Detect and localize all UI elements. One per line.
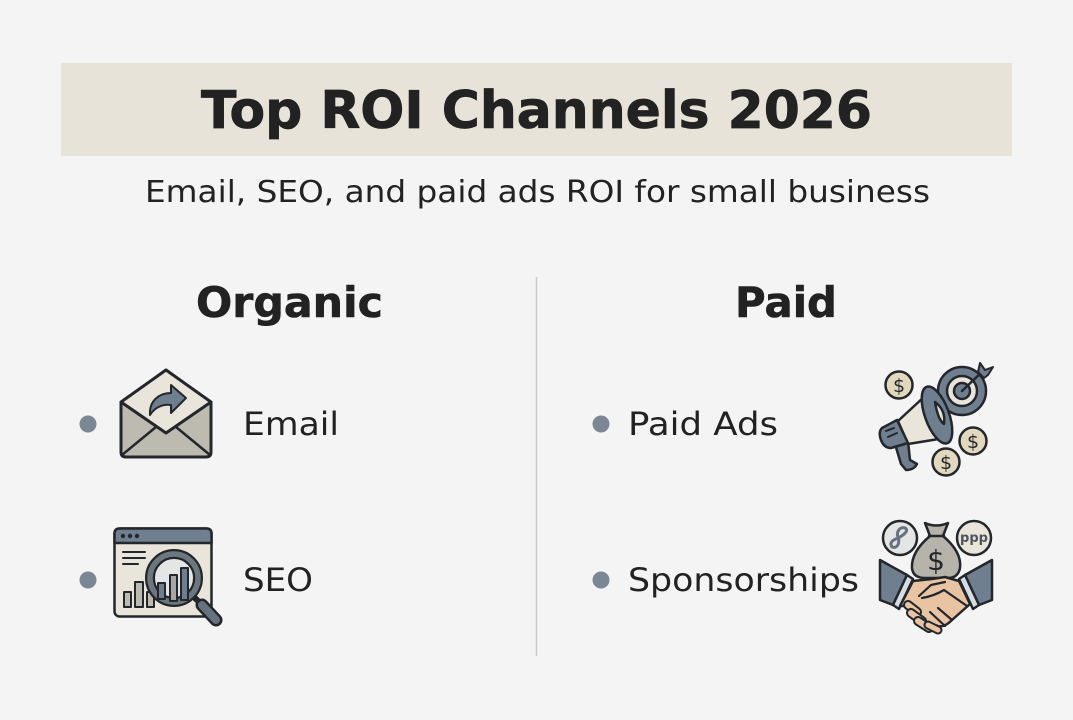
label: email: Email xyxy=(243,405,339,443)
label: sponsorships: Sponsorships xyxy=(628,561,859,599)
icon: handshake with money bag xyxy=(880,521,992,630)
icon: megaphone with target and coins: $ xyxy=(940,452,952,474)
bullet: email xyxy=(80,416,96,432)
label: seo: SEO xyxy=(243,561,313,599)
title: Top ROI Channels 2026 xyxy=(201,81,872,141)
icon: megaphone with target and coins: $ xyxy=(893,375,905,397)
bullet: paid ads xyxy=(592,416,610,432)
panel: paid xyxy=(592,278,993,630)
label: paid ads: Paid Ads xyxy=(628,405,778,443)
subtitle: Email, SEO, and paid ads ROI for small business xyxy=(145,175,930,210)
title banner xyxy=(61,63,1012,156)
icon: envelope xyxy=(121,370,211,457)
icon: handshake with money bag: $ xyxy=(927,544,945,577)
bullet: sponsorships xyxy=(592,572,610,588)
heading: paid: Paid xyxy=(735,278,837,327)
icon: megaphone with target and coins: $ xyxy=(967,431,979,453)
heading: organic: Organic xyxy=(196,278,383,327)
icon: seo magnifier xyxy=(114,528,216,620)
icon: handshake with money bag: ppp xyxy=(960,531,988,546)
bullet: seo xyxy=(80,572,96,588)
panel: organic xyxy=(80,278,383,620)
icon: megaphone with target and coins xyxy=(880,363,993,476)
